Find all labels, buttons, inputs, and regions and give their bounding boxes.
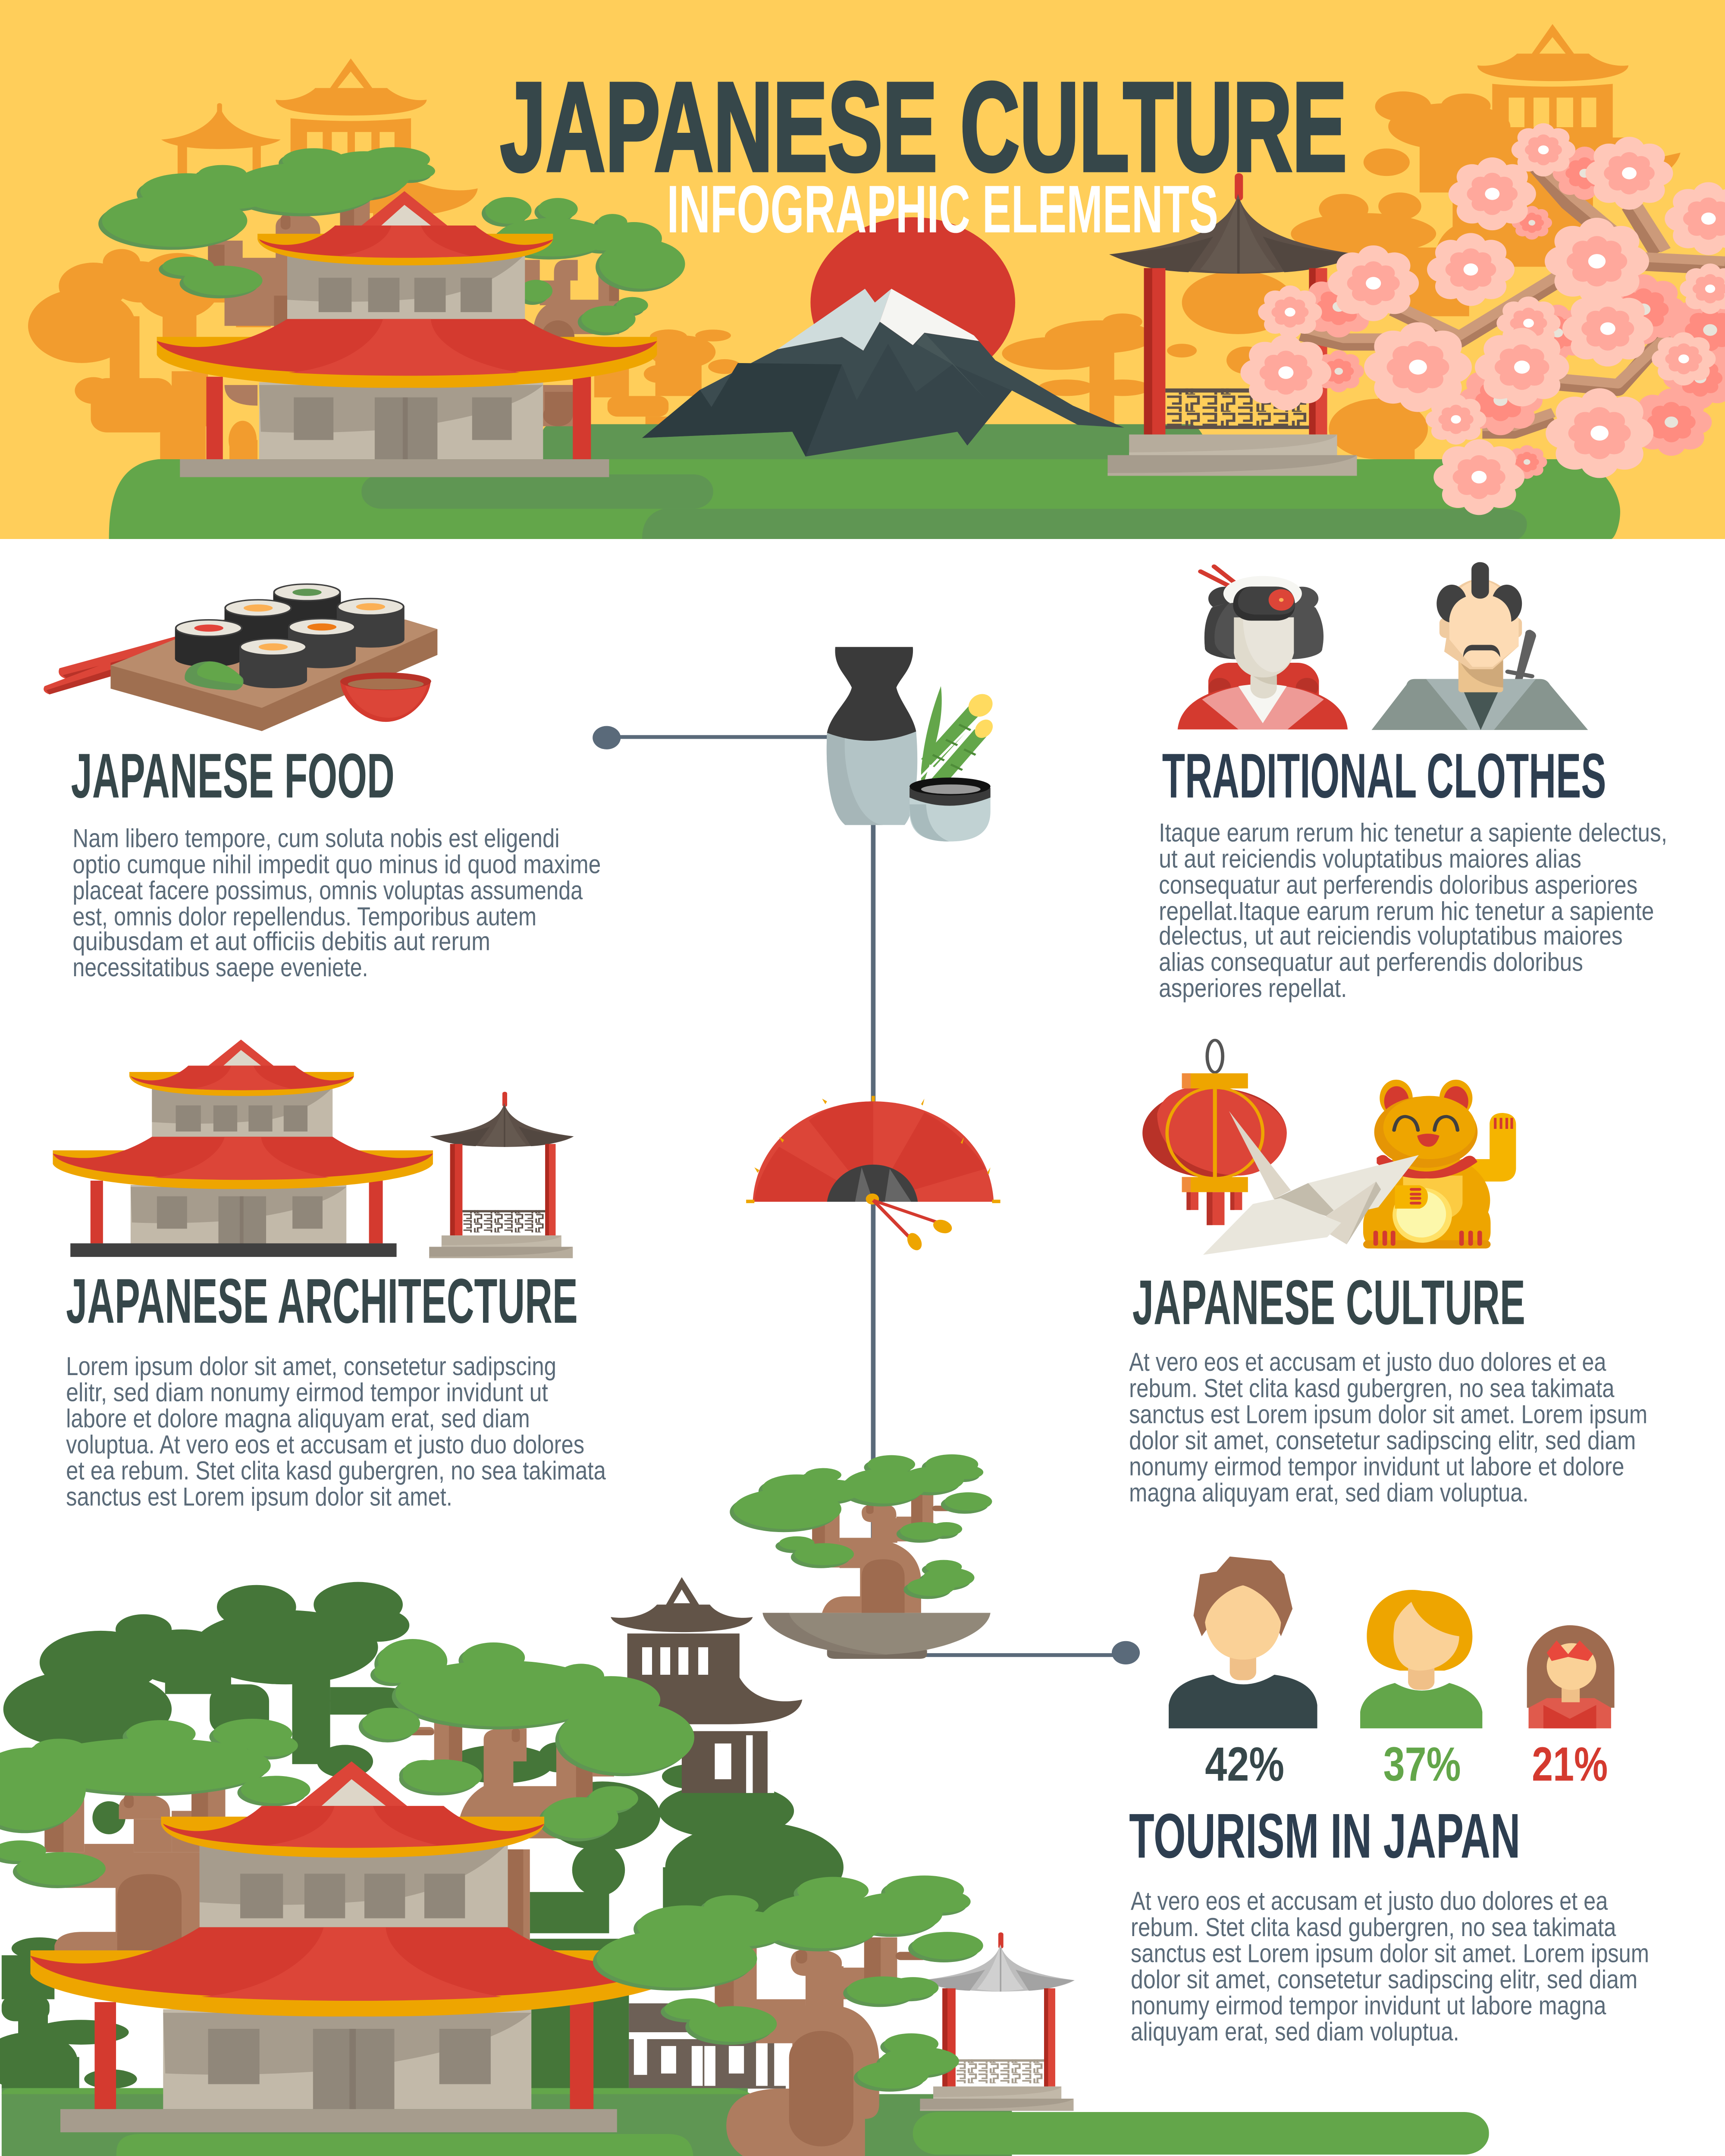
text: Japanese architecture: et ea rebum. Stet clita kasd gubergren, no sea takimata (66, 1456, 606, 1485)
bottom scene: forest and pagodas (0, 1577, 1489, 2156)
banner tree trunks (208, 199, 619, 426)
subtitle: INFOGRAPHIC ELEMENTS (667, 172, 1218, 247)
stat: 37%: 37% (1383, 1737, 1461, 1791)
sun (810, 217, 1015, 388)
text: tourism in Japan: aliquyam erat, sed diam voluptua. (1131, 2017, 1459, 2046)
banner gazebo (1107, 173, 1358, 476)
icon: girl tourist (1527, 1625, 1615, 1728)
green hill (542, 424, 1212, 464)
icon: samurai (1371, 562, 1588, 730)
ground (109, 459, 1620, 539)
text: Japanese food: est, omnis dolor repellendus. Temporibus autem (72, 902, 536, 931)
text: traditional clothes: asperiores repellat. (1159, 974, 1347, 1003)
heading: Japanese food: JAPANESE FOOD (71, 740, 395, 811)
tree trunks (44, 1709, 614, 1968)
heading: Japanese architecture: JAPANESE ARCHITECTURE (66, 1266, 578, 1336)
timeline dot top (593, 726, 621, 749)
banner: Japanese landscape scene (0, 0, 1725, 539)
icon: architecture gazebo (429, 1092, 574, 1258)
icon: sushi (44, 584, 437, 731)
icon: lantern, cat and crane (1142, 1040, 1516, 1255)
icon: geisha (1178, 567, 1348, 730)
text: Japanese architecture: voluptua. At vero eos et accusam et justo duo dolores (66, 1430, 584, 1459)
text: Japanese culture: magna aliquyam erat, sed diam voluptua. (1129, 1478, 1528, 1507)
front trunk (715, 1937, 928, 2156)
green ground (2, 2088, 1012, 2156)
lower pagoda storey (629, 2003, 787, 2089)
icon: bonsai in bowl (730, 1454, 992, 1659)
text: Japanese food: necessitatibus saepe eveniete. (72, 953, 368, 982)
cherry blossom branches (1301, 162, 1725, 432)
back tree foliage (0, 1639, 694, 1888)
front tree foliage (593, 1875, 983, 2092)
banner pagoda (157, 191, 657, 477)
cherry blossoms (1240, 123, 1725, 515)
pagoda window gaps (642, 1647, 774, 1793)
dark green forest (0, 1582, 844, 2090)
dark pagoda (611, 1577, 802, 1793)
text: Japanese food: Nam libero tempore, cum soluta nobis est eligendi (72, 824, 560, 853)
text: Japanese architecture: Lorem ipsum dolor sit amet, consetetur sadipscing (66, 1351, 556, 1381)
text: Japanese food: quibusdam et aut officiis debitis aut rerum (72, 927, 490, 956)
orange silhouettes: pagodas and trees (28, 24, 1681, 459)
timeline dot bottom (1112, 1641, 1140, 1664)
text: Japanese food: placeat facere possimus, omnis voluptas assumenda (72, 876, 583, 905)
icon: sake set (827, 647, 997, 842)
foreground grass (116, 2134, 693, 2156)
text: Japanese food: optio cumque nihil impedit quo minus id quod maxime (72, 850, 601, 879)
large pagoda (30, 1761, 679, 2132)
timeline connector (606, 737, 1126, 1655)
icon: man tourist (1169, 1557, 1317, 1728)
banner tree foliage (98, 147, 685, 335)
stat: 42%: 42% (1205, 1737, 1284, 1791)
text: Japanese architecture: elitr, sed diam nonumy eirmod tempor invidunt ut (66, 1378, 548, 1407)
icon: fan (746, 1096, 1000, 1252)
small gazebo (920, 1932, 1075, 2111)
stat: 21%: 21% (1532, 1737, 1608, 1791)
icon: architecture pagoda (53, 1040, 433, 1257)
mountain (642, 289, 1124, 457)
icon: woman tourist (1360, 1590, 1482, 1728)
text: Japanese architecture: sanctus est Lorem ipsum dolor sit amet. (66, 1482, 452, 1511)
text: Japanese architecture: labore et dolore magna aliquyam erat, sed diam (66, 1404, 530, 1433)
